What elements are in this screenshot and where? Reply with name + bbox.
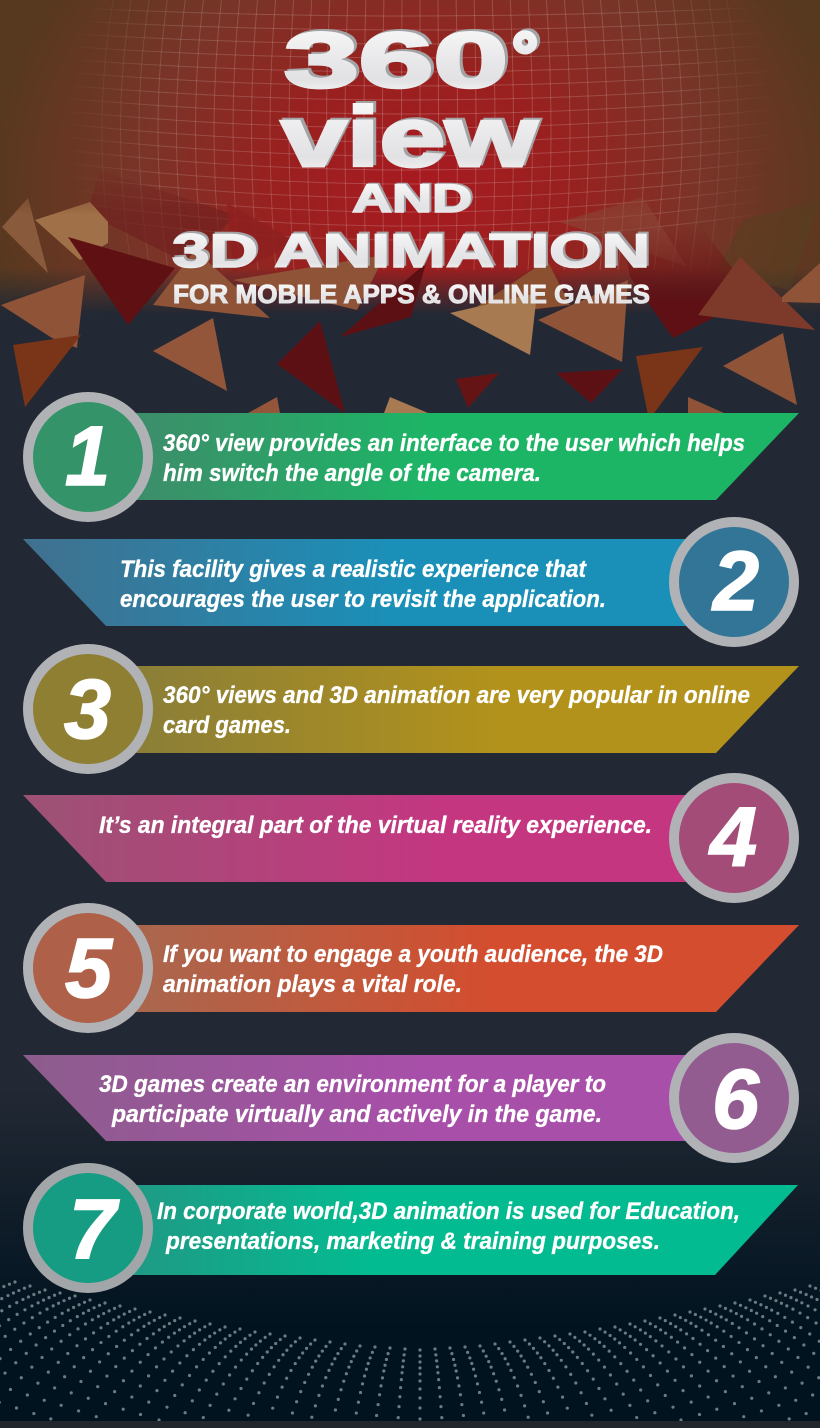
panel: step 5: [28, 908, 799, 1028]
subtitle: FOR MOBILE APPS & ONLINE GAMES: [173, 281, 650, 309]
banner 7: [120, 1185, 798, 1275]
panel: step 7: [28, 1168, 798, 1288]
text 7: presentations, marketing & training purposes.: [165, 1228, 660, 1255]
text 1: him switch the angle of the camera.: [163, 460, 541, 487]
badge 2: 2: [711, 534, 759, 628]
title: view: view: [281, 90, 538, 184]
banner 1: [120, 413, 799, 500]
badge 1: 1: [65, 409, 110, 503]
banner 6: [23, 1055, 710, 1141]
header red glow background: [0, 0, 820, 345]
badge 5: 5: [65, 921, 113, 1015]
title: 360 degrees: [284, 16, 538, 104]
badge 1: [28, 397, 148, 517]
badge 6: [674, 1038, 794, 1158]
perspective grid: [88, 0, 752, 270]
title: 3D ANIMATION: 3D ANIMATION: [172, 224, 650, 277]
badge 7: 7: [69, 1182, 119, 1276]
badge 7: [28, 1168, 148, 1288]
banner 4: [23, 795, 710, 882]
badge 3: 3: [64, 662, 111, 756]
panel: step 6: [23, 1038, 794, 1158]
text 2: encourages the user to revisit the application.: [120, 586, 606, 613]
title: 360 degrees: 360: [284, 16, 508, 104]
text 4: It’s an integral part of the virtual reality experience.: [99, 812, 652, 839]
text 3: card games.: [163, 712, 291, 739]
badge 6: 6: [712, 1052, 760, 1146]
panel: step 3: [28, 649, 799, 769]
badge 2: [674, 522, 794, 642]
badge 5: [28, 908, 148, 1028]
banner 2: [23, 539, 710, 626]
banner 3: [120, 666, 799, 753]
dotted wave surface: [0, 1282, 820, 1420]
panel: step 2: [23, 522, 794, 642]
decorative triangles: [1, 170, 820, 420]
text 6: 3D games create an environment for a player to: [99, 1071, 606, 1098]
bottom strip: [0, 1421, 820, 1428]
badge 4: 4: [708, 790, 757, 884]
panel: step 1: [28, 397, 799, 517]
badge 4: [674, 778, 794, 898]
panel: step 4: [23, 778, 794, 898]
text 1: 360° view provides an interface to the user which helps: [163, 430, 745, 457]
badge 3: [28, 649, 148, 769]
title: [172, 16, 650, 309]
text 5: If you want to engage a youth audience, the 3D: [163, 941, 663, 968]
text 7: In corporate world,3D animation is used for Education,: [157, 1198, 740, 1225]
text 5: animation plays a vital role.: [163, 971, 462, 998]
title: 360 degrees: °: [512, 18, 538, 92]
text 2: This facility gives a realistic experience that: [120, 556, 587, 583]
text 3: 360° views and 3D animation are very popular in online: [163, 682, 750, 709]
banner 5: [120, 925, 799, 1012]
title: AND: AND: [352, 177, 472, 221]
text 6: participate virtually and actively in the game.: [111, 1101, 602, 1128]
